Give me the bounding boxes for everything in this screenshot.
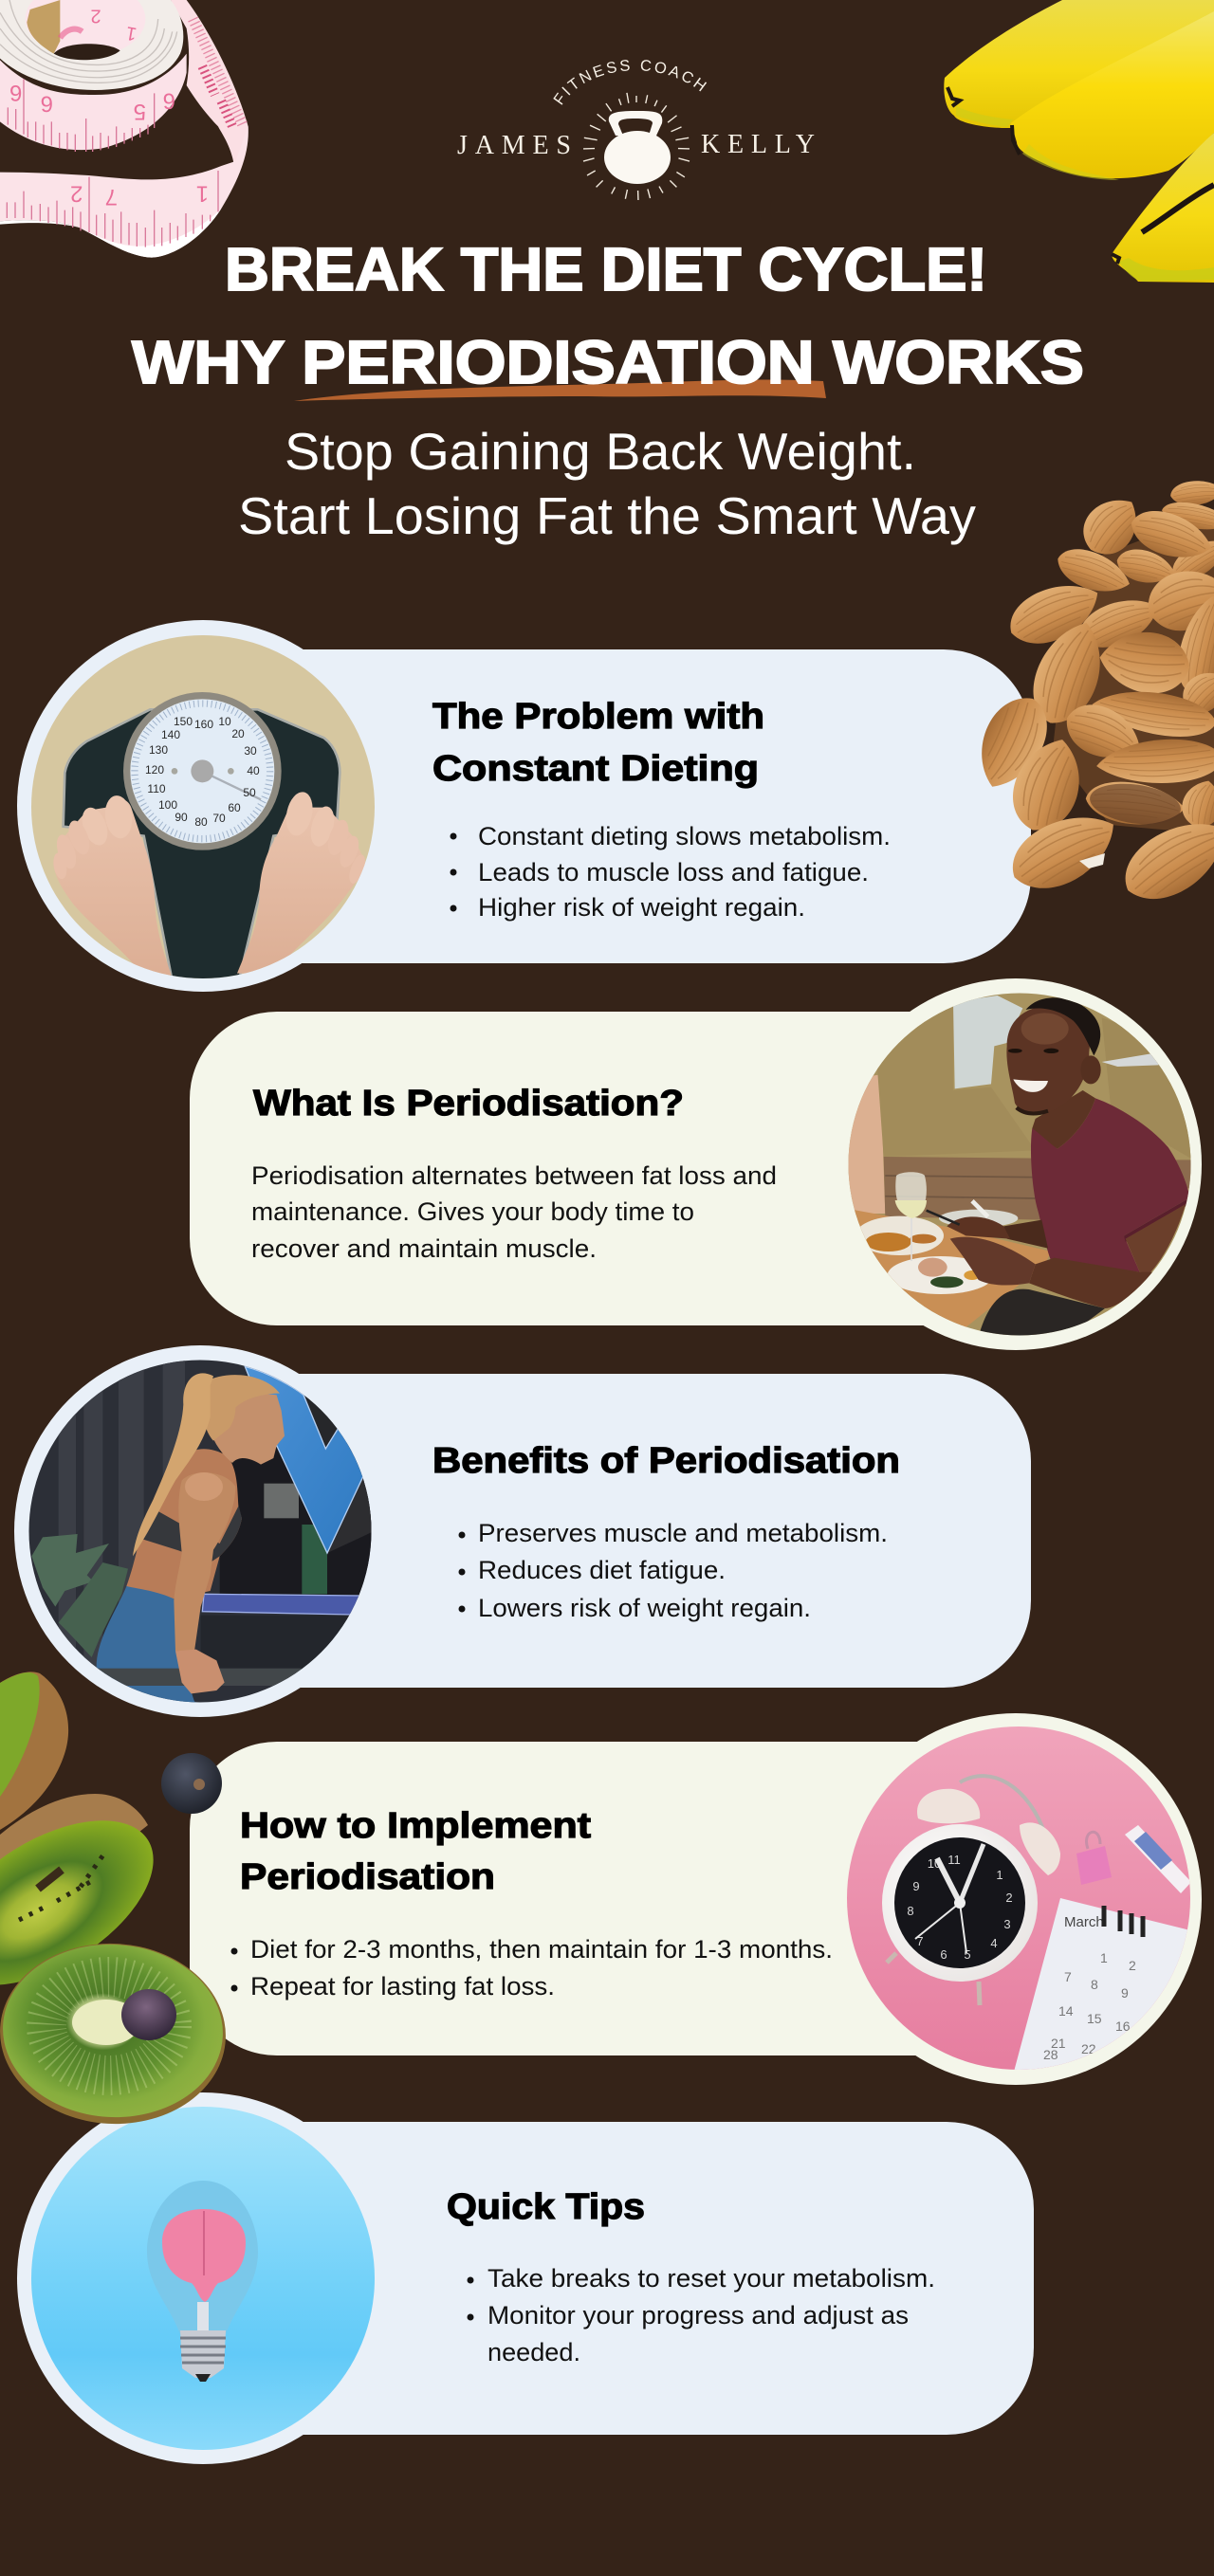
- bullet list: Diet for 2-3 months, then maintain for 1-3 months.: [250, 1935, 833, 1964]
- decoration: tape measure: 5: [134, 99, 146, 124]
- bullet list: Constant dieting slows metabolism.: [478, 822, 891, 850]
- icon rays: [583, 93, 690, 200]
- subtitle: [238, 422, 976, 545]
- heading: [432, 697, 764, 789]
- photo: alarm clock and calendar: 8: [1091, 1977, 1098, 1992]
- panel: the problem with constant dieting: [17, 620, 1031, 992]
- name right: KELLY: [701, 130, 815, 159]
- decoration: tape measure: 1: [196, 181, 209, 207]
- bullet list: Reduces diet fatigue.: [478, 1556, 726, 1584]
- photo: feet on weighing scale: 40: [247, 764, 260, 777]
- photo: alarm clock and calendar: 2: [1129, 1958, 1136, 1973]
- arc text: FITNESS COACH: [553, 60, 708, 105]
- name left: JAMES: [457, 131, 571, 160]
- decoration: kiwis and berries: [0, 1672, 230, 2129]
- photo: athlete at bar: [24, 1354, 381, 1711]
- panel 3 background: [142, 1374, 1031, 1688]
- banana 3: [1112, 133, 1214, 283]
- photo: alarm clock and calendar: 2: [1005, 1891, 1013, 1905]
- heading: What Is Periodisation?: [253, 1084, 684, 1124]
- photo: alarm clock and calendar: 1: [1100, 1950, 1108, 1965]
- photo: feet on weighing scale: 80: [194, 815, 208, 829]
- photo: alarm clock and calendar: 9: [1121, 1985, 1129, 2001]
- photo: feet on weighing scale: 60: [228, 801, 241, 814]
- bullet list: Monitor your progress and adjust as: [487, 2301, 909, 2329]
- photo: alarm clock and calendar: 10: [928, 1856, 941, 1871]
- photo: feet on weighing scale: 140: [161, 728, 180, 741]
- panel 4 circle frame: [830, 1713, 1202, 2085]
- heading: Quick Tips: [447, 2187, 645, 2227]
- paragraph: [251, 1161, 777, 1263]
- photo: alarm clock and calendar: 7: [916, 1934, 924, 1948]
- photo: alarm clock and calendar: 22: [1081, 2041, 1096, 2056]
- photo: feet on weighing scale: 50: [243, 786, 256, 799]
- paragraph: maintenance. Gives your body time to: [251, 1197, 694, 1226]
- grape on kiwi: [121, 1989, 176, 2040]
- photo: man eating at table: [839, 986, 1203, 1343]
- banana 1: [944, 0, 1214, 128]
- photo: alarm clock and calendar: 1: [996, 1868, 1003, 1882]
- decoration: almonds: [964, 479, 1214, 915]
- photo: feet on weighing scale: 10: [218, 715, 231, 728]
- title: [132, 235, 1084, 396]
- bullet list: Higher risk of weight regain.: [478, 893, 805, 922]
- bullet list: Lowers risk of weight regain.: [478, 1594, 811, 1622]
- underline brush stroke: [294, 379, 826, 401]
- photo: alarm clock and calendar: 16: [1115, 2019, 1131, 2034]
- heading: Constant Dieting: [432, 749, 759, 789]
- photo: brain in light bulb: [28, 2105, 379, 2452]
- photo: alarm clock and calendar: [844, 1726, 1195, 2076]
- photo: alarm clock and calendar: March: [1064, 1914, 1104, 1930]
- panel: benefits of periodisation: [14, 1345, 1031, 1717]
- photo: feet on weighing scale: 100: [158, 798, 177, 812]
- photo: alarm clock and calendar: 4: [990, 1936, 998, 1950]
- heading: The Problem with: [432, 697, 764, 737]
- kiwi slice 1: [0, 1672, 68, 1830]
- paragraph: recover and maintain muscle.: [251, 1234, 597, 1263]
- photo: feet on weighing scale: 90: [175, 811, 188, 824]
- photo: feet on weighing scale: 130: [149, 743, 168, 757]
- photo: alarm clock and calendar: 5: [964, 1947, 971, 1962]
- heading: How to Implement: [240, 1806, 591, 1846]
- subtitle: Stop Gaining Back Weight.: [285, 422, 916, 481]
- panel 4 background: [190, 1742, 1062, 2055]
- title: WHY PERIODISATION WORKS: [132, 328, 1084, 396]
- paragraph: Periodisation alternates between fat loss and: [251, 1161, 777, 1190]
- panel 1 circle frame: [17, 620, 389, 992]
- bullet list: Preserves muscle and metabolism.: [478, 1519, 888, 1547]
- bullet list: [231, 1935, 833, 2001]
- photo: feet on weighing scale: [28, 630, 379, 983]
- bullet list: needed.: [487, 2338, 580, 2366]
- photo: alarm clock and calendar: 14: [1058, 2003, 1074, 2019]
- title: BREAK THE DIET CYCLE!: [225, 235, 987, 303]
- panel 2 circle frame: [830, 978, 1202, 1350]
- photo: feet on weighing scale: 30: [244, 744, 257, 758]
- logo: James Kelly fitness coach: [457, 60, 815, 200]
- photo: feet on weighing scale: 150: [174, 715, 193, 728]
- blueberry: [161, 1753, 222, 1814]
- photo: feet on weighing scale: 70: [212, 812, 226, 825]
- banana 2: [1011, 11, 1214, 180]
- decoration: tape measure: [0, 0, 248, 258]
- panel 2 background: [190, 1012, 1062, 1325]
- bullet list: Take breaks to reset your metabolism.: [487, 2264, 935, 2293]
- heading: Periodisation: [240, 1857, 495, 1897]
- panel 3 circle frame: [14, 1345, 386, 1717]
- panel 5 circle frame: [17, 2092, 389, 2464]
- decoration: tape measure: 7: [105, 184, 118, 210]
- decoration: tape measure: 1: [124, 22, 138, 45]
- kiwi slice 3: [0, 1938, 230, 2129]
- bullet list: [467, 2264, 935, 2366]
- photo: alarm clock and calendar: 28: [1043, 2047, 1058, 2062]
- decoration: tape measure: 2: [70, 181, 83, 207]
- decoration: bananas: [944, 0, 1214, 283]
- photo: feet on weighing scale: 160: [194, 718, 213, 731]
- dark almond: [1083, 776, 1187, 831]
- photo: alarm clock and calendar: 11: [947, 1853, 961, 1867]
- decoration: tape measure: 2: [91, 6, 101, 27]
- panel 1 background: [142, 649, 1031, 963]
- bullet list: [459, 1519, 888, 1622]
- panel: quick tips: [17, 2092, 1034, 2464]
- bullet list: Repeat for lasting fat loss.: [250, 1972, 555, 2001]
- subtitle: Start Losing Fat the Smart Way: [238, 486, 976, 545]
- photo: alarm clock and calendar: 9: [912, 1879, 920, 1893]
- photo: alarm clock and calendar: 21: [1051, 2036, 1066, 2051]
- kettlebell icon: [604, 111, 671, 184]
- decoration: tape measure: 6: [9, 80, 22, 105]
- photo: alarm clock and calendar: 15: [1087, 2011, 1102, 2026]
- photo: alarm clock and calendar: 3: [1003, 1917, 1011, 1931]
- photo: alarm clock and calendar: 6: [940, 1947, 947, 1962]
- heading: [240, 1806, 591, 1897]
- heading: Benefits of Periodisation: [432, 1441, 900, 1481]
- panel: how to implement periodisation: [190, 1713, 1202, 2085]
- photo: feet on weighing scale: 120: [145, 763, 164, 776]
- photo: alarm clock and calendar: 8: [907, 1904, 914, 1918]
- bullet list: Leads to muscle loss and fatigue.: [478, 858, 869, 886]
- bullet list: [450, 822, 891, 922]
- panel: what is periodisation: [190, 978, 1203, 1350]
- photo: feet on weighing scale: 20: [231, 727, 245, 740]
- photo: alarm clock and calendar: 7: [1064, 1969, 1072, 1984]
- decoration: tape measure: 6: [163, 87, 175, 113]
- panel 5 background: [142, 2122, 1034, 2435]
- photo: feet on weighing scale: 110: [147, 782, 166, 795]
- decoration: tape measure: 6: [41, 91, 53, 117]
- kiwi slice 2: [0, 1787, 181, 2019]
